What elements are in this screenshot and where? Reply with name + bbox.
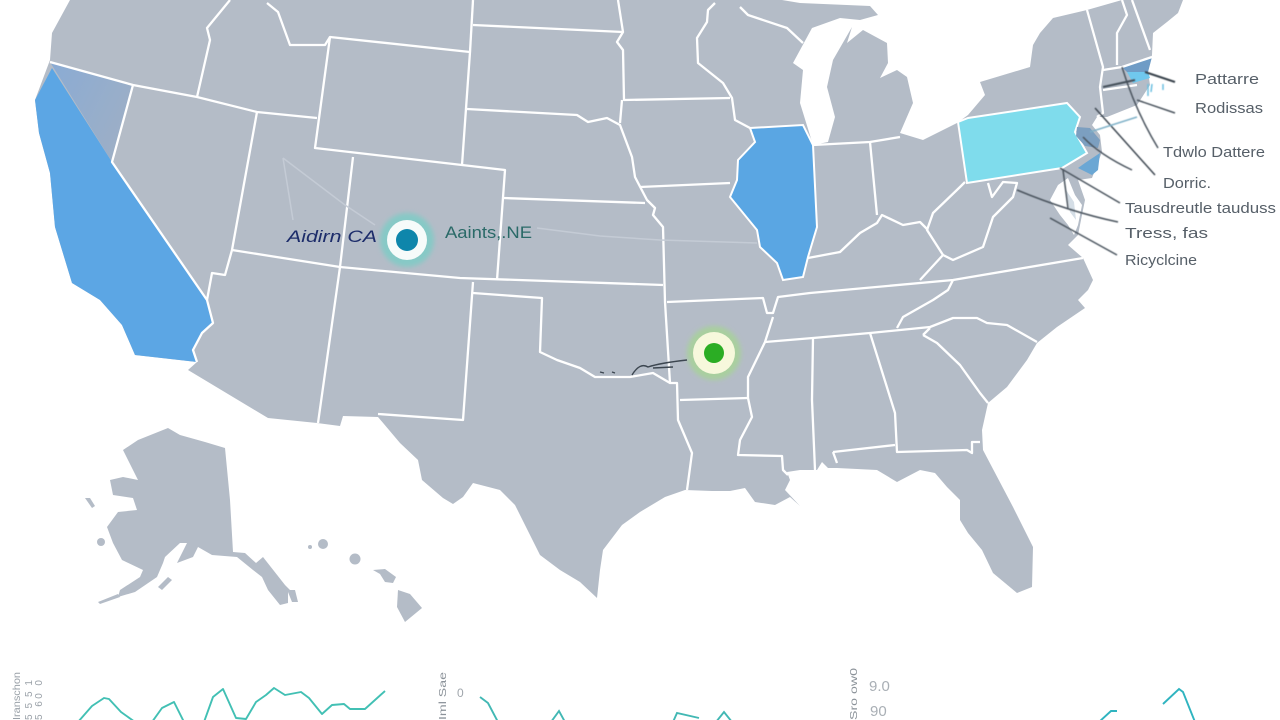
chart: left sparkline: [12, 672, 385, 720]
axis labels: 5 5 5 1: [24, 680, 35, 720]
state: Massachusetts: [1122, 57, 1152, 72]
map: contiguous states: [35, 0, 1183, 598]
state: California: [35, 68, 213, 362]
leader: green pin squiggle: [600, 360, 687, 375]
axis labels: [438, 671, 464, 720]
axis labels: [12, 672, 45, 720]
map: Hawaii: [308, 539, 422, 622]
northeast labels: Dorric.: [1163, 175, 1211, 192]
axis labels: 5 60 0: [34, 680, 45, 720]
state: Pennsylvania: [958, 103, 1087, 183]
marker: Colorado teal pin: [380, 213, 434, 267]
state borders: [50, 0, 1152, 490]
line: [1099, 711, 1117, 720]
axis labels: Iranschon: [12, 672, 23, 720]
state: New Jersey: [1076, 127, 1100, 148]
label: right of teal pin: Aaints,.NE: [445, 223, 532, 242]
axis labels: Sro ow0: [849, 667, 860, 720]
Delmarva detail: [1066, 190, 1076, 220]
label: left of teal pin: Aidirn CA: [286, 227, 377, 246]
northeast labels: Tdwlo Dattere: [1163, 144, 1265, 161]
northeast leader lines: [1017, 67, 1175, 255]
line: [480, 697, 498, 720]
chart: middle sparkline: [438, 671, 732, 720]
state: Illinois: [730, 125, 817, 280]
northeast labels: Pattarre: [1195, 71, 1259, 88]
silhouette: [35, 0, 1183, 598]
map: Alaska: [85, 428, 298, 605]
axis labels: [849, 667, 890, 720]
faint route lines: [283, 158, 757, 243]
Chesapeake bay: [1050, 178, 1082, 235]
northeast labels: Tausdreutle tauduss: [1125, 200, 1276, 217]
state: Rhode Island: [1127, 72, 1150, 83]
axis labels: 90: [870, 703, 887, 720]
state: Delaware: [1078, 153, 1100, 175]
state: Nevada tint: [50, 62, 133, 162]
northeast labels: [1125, 71, 1276, 269]
line: [78, 698, 135, 720]
axis labels: 0: [457, 686, 464, 700]
northeast labels: Ricyclcine: [1125, 252, 1197, 269]
chart: right sparkline: [849, 667, 1195, 720]
axis labels: 9.0: [869, 678, 890, 695]
northeast labels: Tress, fas: [1125, 225, 1208, 242]
axis labels: Iml Sae: [438, 671, 449, 720]
marker: Arkansas green pin: [687, 326, 741, 380]
northeast labels: Rodissas: [1195, 100, 1263, 117]
